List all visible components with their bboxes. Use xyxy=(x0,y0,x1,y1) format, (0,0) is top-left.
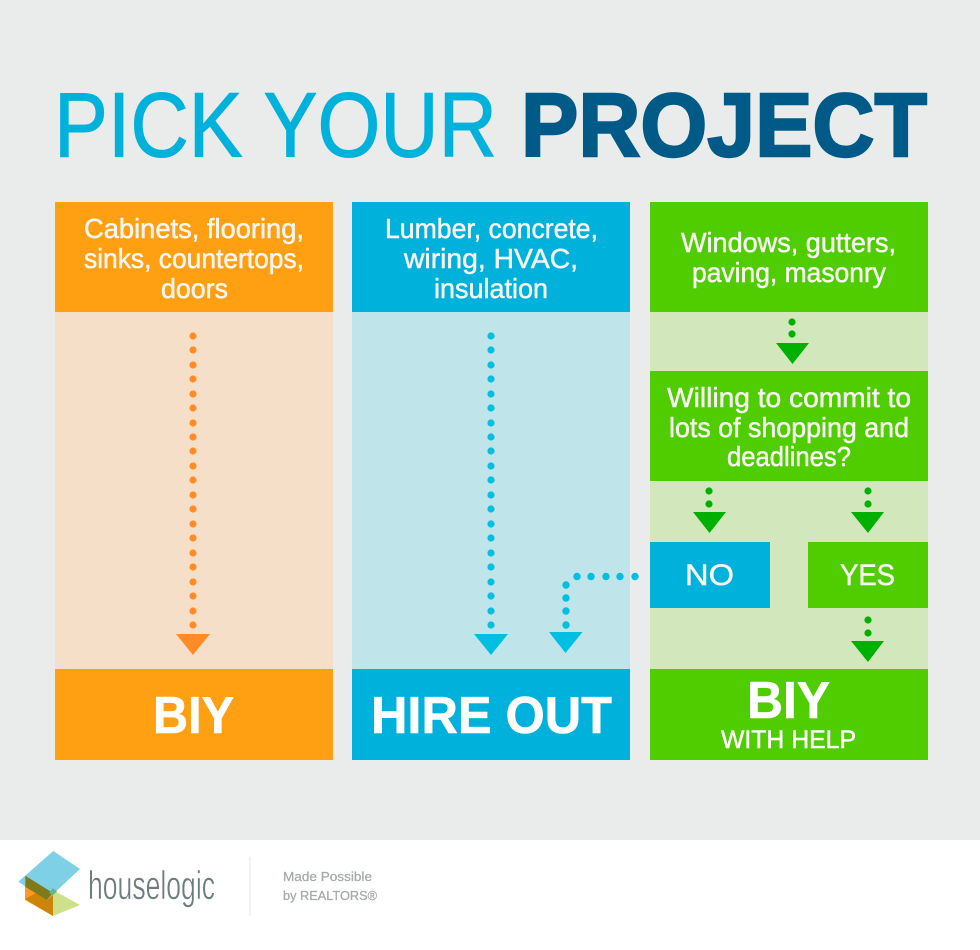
result: hire out xyxy=(352,669,630,760)
header: windows and gutters: paving, masonry xyxy=(692,257,886,288)
arrow: green to result xyxy=(851,616,884,662)
header: cabinets and flooring: sinks, countertops, xyxy=(84,243,304,274)
title xyxy=(54,74,927,176)
header: windows and gutters: Windows, gutters, xyxy=(681,227,896,258)
title: PICK YOUR xyxy=(54,74,497,176)
question box: deadlines? xyxy=(727,441,851,472)
question box: lots of shopping and xyxy=(669,412,909,443)
panel: hire out column xyxy=(352,202,630,760)
header: windows and gutters xyxy=(650,202,928,312)
made possible by realtors: by REALTORS® xyxy=(283,888,377,903)
logo wordmark: houselogic xyxy=(88,864,215,908)
logo icon xyxy=(18,851,80,916)
yes box: YES xyxy=(840,559,895,592)
arrow: orange dotted xyxy=(176,332,210,655)
result: hire out: HIRE OUT xyxy=(371,687,612,745)
yes box xyxy=(808,542,928,608)
header: cabinets and flooring: Cabinets, flooring, xyxy=(84,213,304,244)
question box xyxy=(650,371,928,481)
header: cabinets and flooring xyxy=(55,202,333,312)
result: BIY with help: BIY xyxy=(747,672,830,730)
header: lumber and concrete: Lumber, concrete, xyxy=(385,213,598,244)
arrow: no to hire out xyxy=(549,573,639,653)
arrow: green to yes xyxy=(851,487,884,533)
result: BIY with help xyxy=(650,669,928,760)
made possible by realtors: Made Possible xyxy=(283,869,372,884)
title: PROJECT xyxy=(521,76,927,176)
made possible by realtors xyxy=(250,857,377,916)
arrow: green to no xyxy=(693,487,726,533)
panel: BIY with help column xyxy=(650,202,928,760)
result: BIY xyxy=(55,669,333,760)
footer xyxy=(0,840,980,950)
panel: BIY column xyxy=(55,202,333,760)
result: BIY with help: WITH HELP xyxy=(721,726,856,754)
header: lumber and concrete xyxy=(352,202,630,312)
header: lumber and concrete: wiring, HVAC, xyxy=(403,243,578,274)
header: lumber and concrete: insulation xyxy=(434,273,548,304)
result: BIY: BIY xyxy=(153,687,234,745)
question box: Willing to commit to xyxy=(667,382,911,413)
header: cabinets and flooring: doors xyxy=(161,273,228,304)
no box: NO xyxy=(685,559,734,592)
no box xyxy=(650,542,770,608)
arrow: green to question xyxy=(776,318,809,364)
arrow: blue dotted xyxy=(474,332,508,655)
